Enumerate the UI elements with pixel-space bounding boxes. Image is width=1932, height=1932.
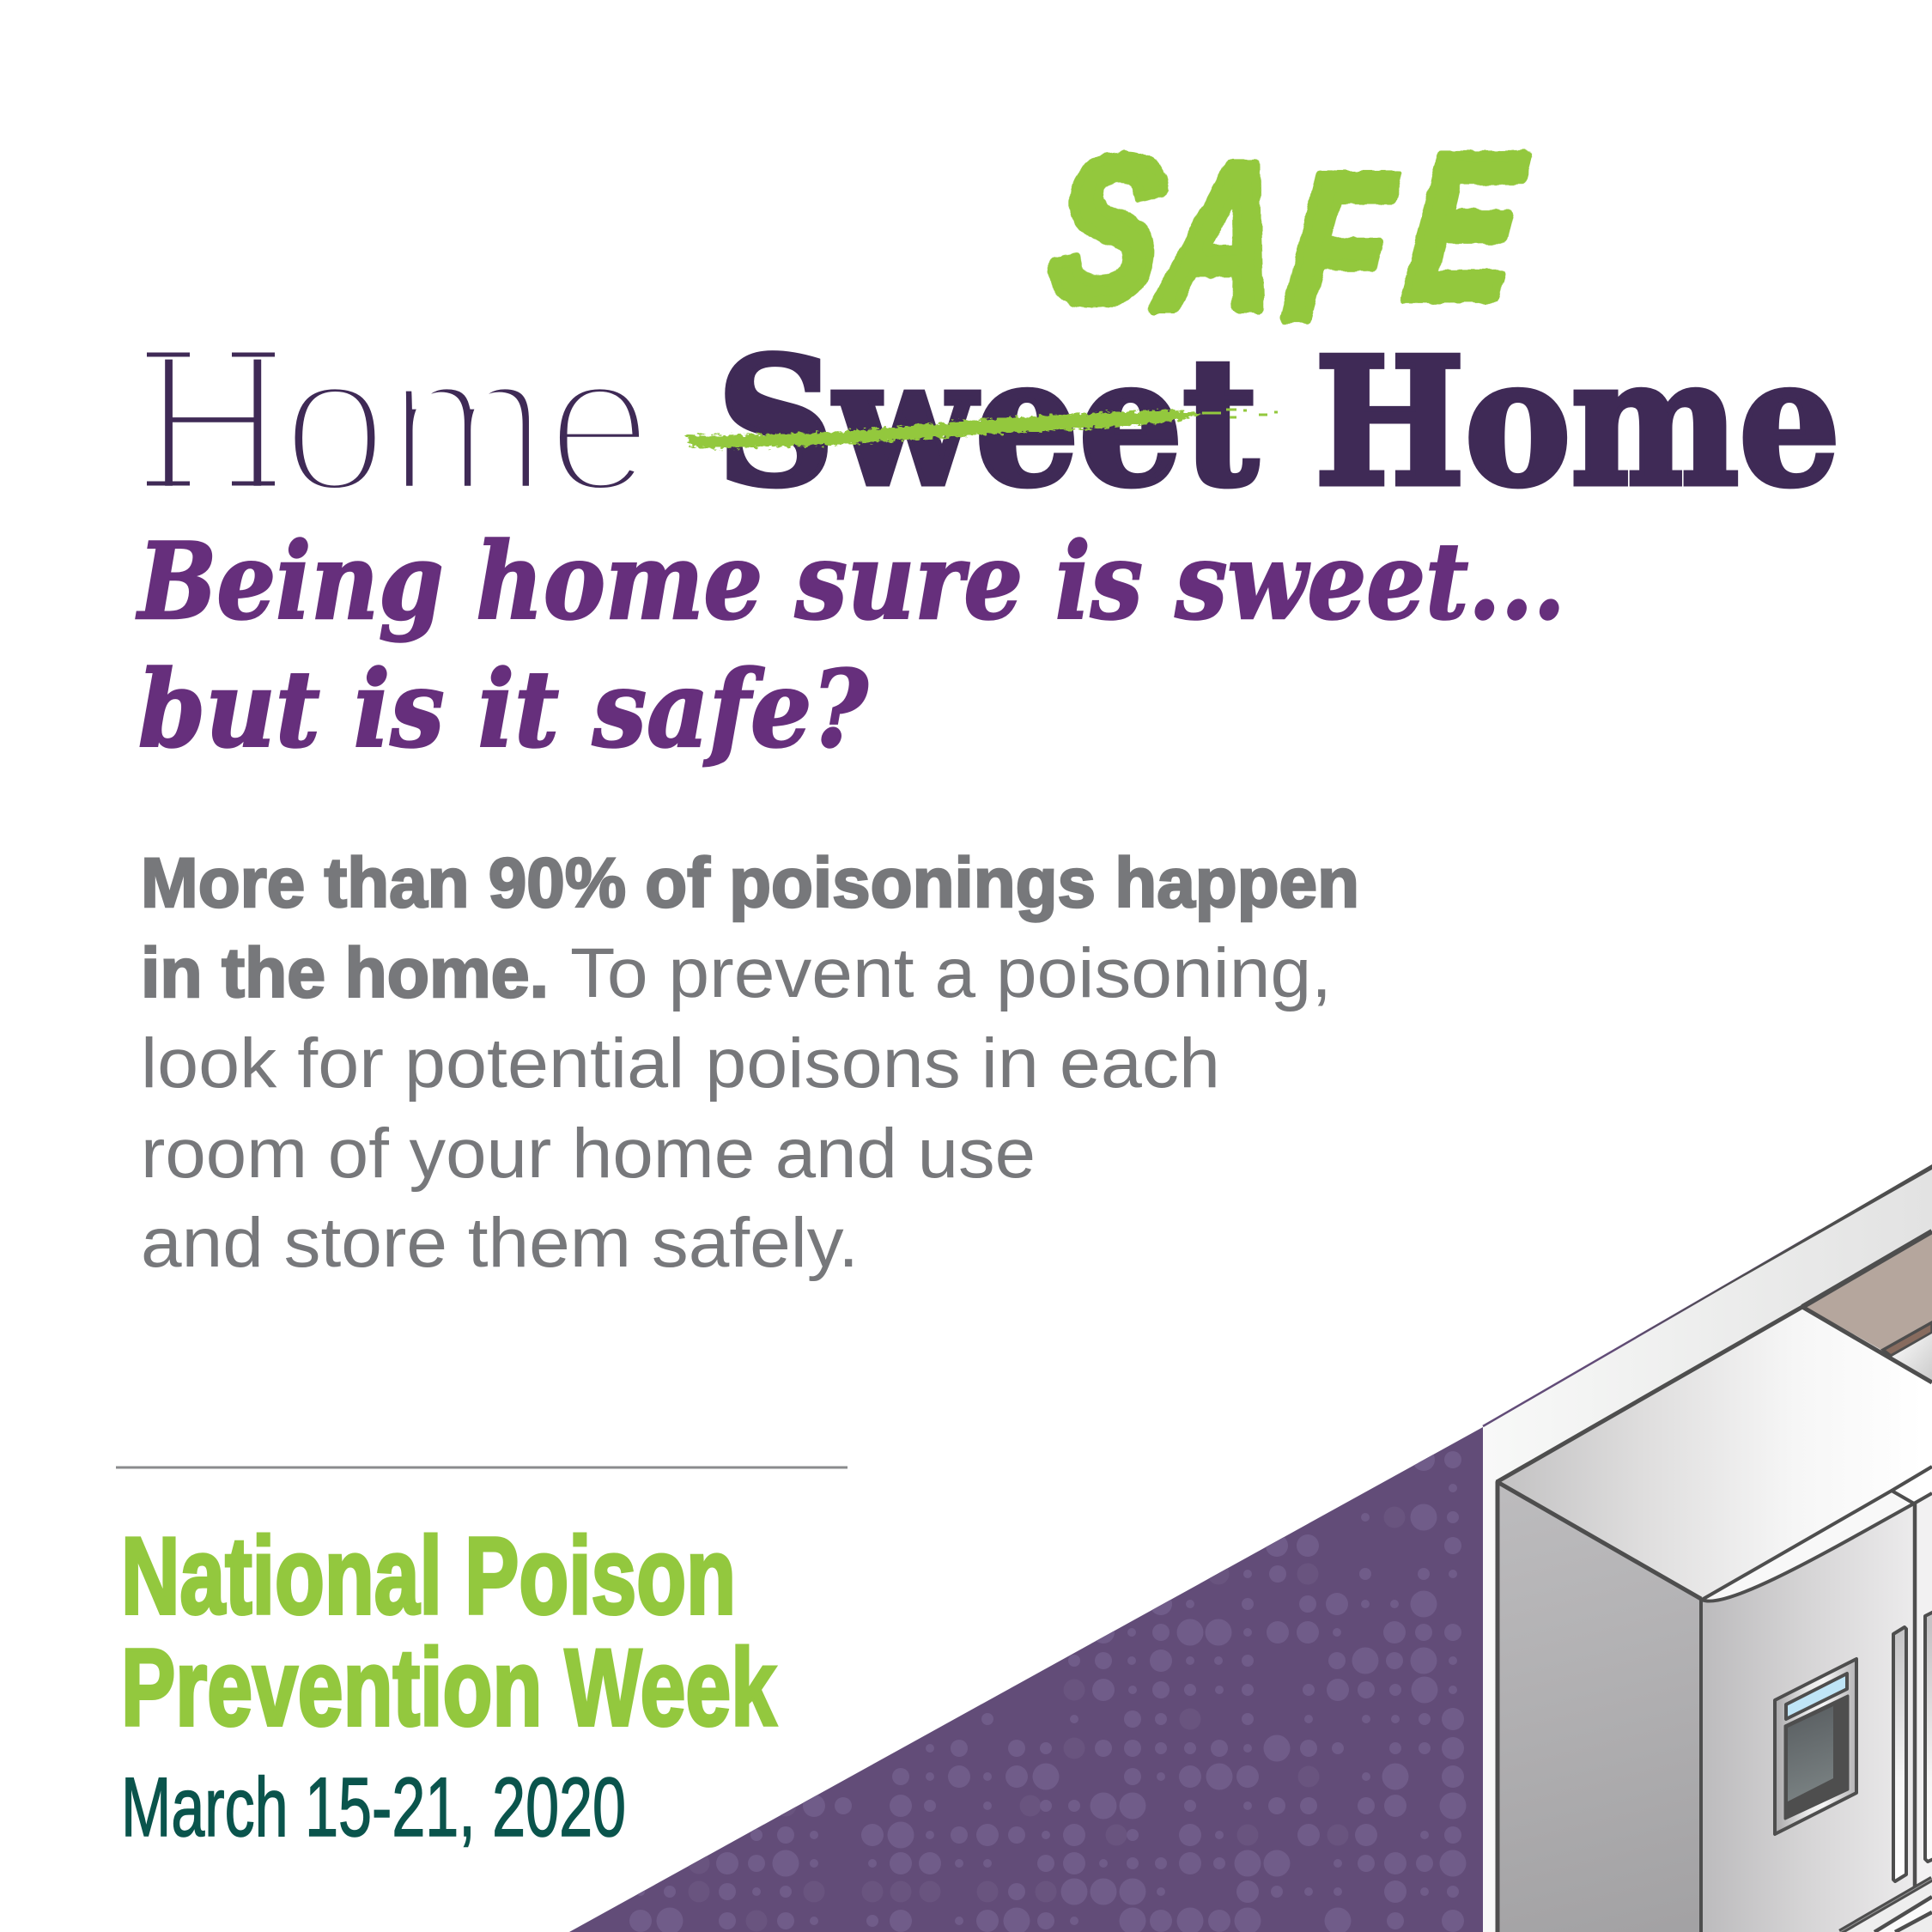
title word: bold Home: Home bbox=[1315, 319, 1840, 526]
right door bbox=[1915, 1494, 1932, 1889]
purple dotted triangle bbox=[569, 1427, 1483, 1932]
wall bbox=[1483, 1166, 1932, 1932]
body text: and store them safely. bbox=[141, 1204, 859, 1282]
bottom drawer bbox=[1840, 1879, 1932, 1932]
door lip bbox=[1702, 1491, 1914, 1601]
title word: thin Home: Home bbox=[144, 312, 653, 534]
body text: room of your home and use bbox=[141, 1115, 1036, 1193]
subheading: but is it safe? bbox=[138, 648, 870, 772]
brush word SAFE: SAFE bbox=[1041, 111, 1534, 361]
body text bbox=[141, 844, 1359, 1282]
cabinet recess above the fridge bbox=[1802, 1231, 1932, 1381]
water dispenser bbox=[1775, 1659, 1856, 1834]
green brush strike-through bbox=[686, 410, 1278, 448]
event title: National Poison Prevention Week: Prevention Week bbox=[121, 1626, 776, 1748]
subheading: Being home sure is sweet... bbox=[136, 520, 1565, 644]
title: Home Sweet Home bbox=[144, 312, 1840, 534]
fridge side bbox=[1497, 1482, 1701, 1932]
title word: bold Sweet: Sweet bbox=[717, 319, 1258, 526]
body text: More than 90% of poisonings happen bbox=[141, 844, 1359, 922]
body text: To prevent a poisoning, bbox=[570, 934, 1332, 1012]
door handles bbox=[1893, 1627, 1906, 1881]
illustration: isometric kitchen wall and refrigerator bbox=[1483, 1164, 1932, 1932]
event title: National Poison Prevention Week: National Poison bbox=[121, 1515, 736, 1637]
event title: National Poison Prevention Week bbox=[121, 1515, 776, 1748]
body text: look for potential poisons in each bbox=[141, 1024, 1220, 1103]
event dates: March 15-21, 2020 bbox=[121, 1760, 626, 1854]
body text: in the home. bbox=[141, 934, 549, 1012]
fridge top bbox=[1497, 1307, 1932, 1599]
subheading bbox=[136, 520, 1565, 772]
left door bbox=[1702, 1504, 1914, 1932]
